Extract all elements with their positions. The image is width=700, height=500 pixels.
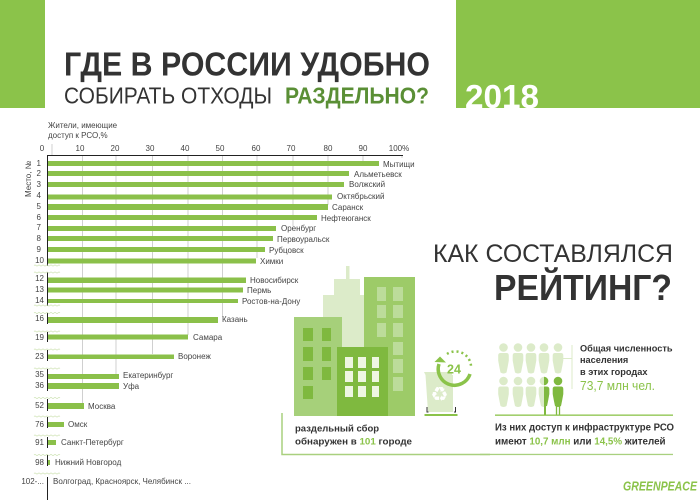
axis break marks [34, 265, 60, 474]
city labels: Нефтеюганск [321, 214, 371, 223]
panel: frame around buildings text [282, 413, 490, 454]
city labels: Саранск [332, 203, 364, 212]
rank numbers: 10 [35, 256, 45, 265]
rank numbers: 8 [37, 234, 42, 243]
rank numbers: 36 [35, 381, 45, 390]
heading: how the rating was made: КАК СОСТАВЛЯЛСЯ [433, 240, 673, 268]
grid lines [52, 144, 402, 403]
axis numbers: 80 [324, 144, 333, 153]
rank numbers: 5 [37, 202, 42, 211]
rank numbers: 76 [35, 420, 45, 429]
heading: how the rating was made: РЕЙТИНГ? [494, 266, 672, 308]
city labels: Екатеринбург [123, 371, 173, 380]
vertical axis title: Место, № [24, 160, 33, 197]
city labels: Омск [68, 420, 88, 429]
axis numbers: 90 [359, 144, 368, 153]
rank numbers: 23 [35, 352, 45, 361]
text: access to infrastructure: имеют 10,7 млн или 14,5% жителей [495, 436, 666, 448]
green header block left [0, 0, 45, 108]
rank numbers: 9 [37, 245, 42, 254]
rank numbers: 14 [35, 296, 45, 305]
rank numbers: 2 [37, 169, 42, 178]
city labels: Химки [260, 257, 283, 266]
text: total population [580, 344, 673, 393]
text: separate collection found in 101 cities: раздельный сбор [295, 424, 379, 434]
title: РАЗДЕЛЬНО? [285, 82, 429, 108]
city labels: Первоуральск [277, 235, 330, 244]
rank numbers: 3 [37, 180, 42, 189]
city labels: Волгоград, Красноярск, Челябинск ... [53, 477, 191, 486]
rank numbers: 13 [35, 285, 45, 294]
text: separate collection found in 101 cities: обнаружен в 101 городе [295, 436, 412, 448]
city labels: Ростов-на-Дону [242, 297, 300, 306]
axis lines [48, 156, 403, 500]
city labels: Нижний Новгород [55, 458, 122, 467]
text: access to infrastructure: Из них доступ к инфраструктуре РСО [495, 422, 674, 434]
city labels: Октябрьский [337, 192, 384, 201]
axis title: Жители, имеющие [48, 121, 118, 130]
city labels: Альметьевск [354, 170, 402, 179]
illustration: city buildings [294, 266, 415, 416]
text: total population: населения [580, 355, 628, 365]
rank numbers: 52 [35, 401, 45, 410]
city labels: Рубцовск [269, 246, 304, 255]
icon: recycling bin with 24 hour arrow: ♻ [431, 382, 448, 406]
divider line [495, 414, 673, 416]
city labels: Казань [222, 315, 248, 324]
axis numbers: 30 [146, 144, 155, 153]
axis numbers [40, 144, 409, 153]
city labels: Воронеж [178, 352, 211, 361]
city labels: Самара [193, 333, 223, 342]
heading: how the rating was made [433, 240, 673, 308]
rank numbers: 102-... [21, 477, 44, 486]
icon: recycling bin with 24 hour arrow: 24 [447, 362, 461, 376]
axis numbers: 10 [76, 144, 85, 153]
rank numbers [21, 159, 45, 486]
bar chart: residents with access to separate collection [21, 121, 415, 500]
axis title: доступ к РСО,% [48, 131, 108, 140]
rank numbers: 19 [35, 333, 45, 342]
icon: people pictogram [498, 343, 572, 415]
rank numbers: 91 [35, 438, 45, 447]
axis numbers: 0 [40, 144, 45, 153]
city labels: Уфа [123, 382, 140, 391]
city labels: Волжский [349, 180, 385, 189]
title: ГДЕ В РОССИИ УДОБНО [64, 46, 430, 82]
rank numbers: 1 [37, 159, 42, 168]
axis numbers: 20 [111, 144, 120, 153]
rank numbers: 98 [35, 458, 45, 467]
divider line [480, 454, 673, 455]
text: total population: в этих городах [580, 367, 648, 377]
city labels: Новосибирск [250, 276, 299, 285]
icon: recycling bin with 24 hour arrow [424, 351, 471, 416]
axis numbers: 70 [287, 144, 296, 153]
title: СОБИРАТЬ ОТХОДЫ [64, 82, 272, 108]
year 2018: 2018 [465, 78, 539, 115]
axis numbers: 40 [181, 144, 190, 153]
city labels: Санкт-Петербург [61, 438, 124, 447]
green header block right [456, 0, 700, 108]
rank numbers: 4 [37, 191, 42, 200]
text: total population: Общая численность [580, 344, 673, 354]
bars [48, 161, 379, 465]
title [64, 46, 430, 108]
rank numbers: 35 [35, 370, 45, 379]
axis numbers: 60 [252, 144, 261, 153]
rank numbers: 12 [35, 274, 45, 283]
text: access to infrastructure [495, 422, 674, 448]
city labels: Москва [88, 402, 116, 411]
rank numbers: 6 [37, 213, 42, 222]
text: separate collection found in 101 cities [295, 424, 412, 448]
text: total population: 73,7 млн чел. [580, 379, 655, 393]
city labels: Мытищи [383, 160, 415, 169]
axis numbers: 50 [216, 144, 225, 153]
rank numbers: 7 [37, 223, 42, 232]
rank numbers: 16 [35, 314, 45, 323]
city labels: Пермь [247, 286, 271, 295]
city labels [53, 160, 415, 486]
city labels: Оренбург [281, 224, 316, 233]
axis numbers: 100% [389, 144, 409, 153]
